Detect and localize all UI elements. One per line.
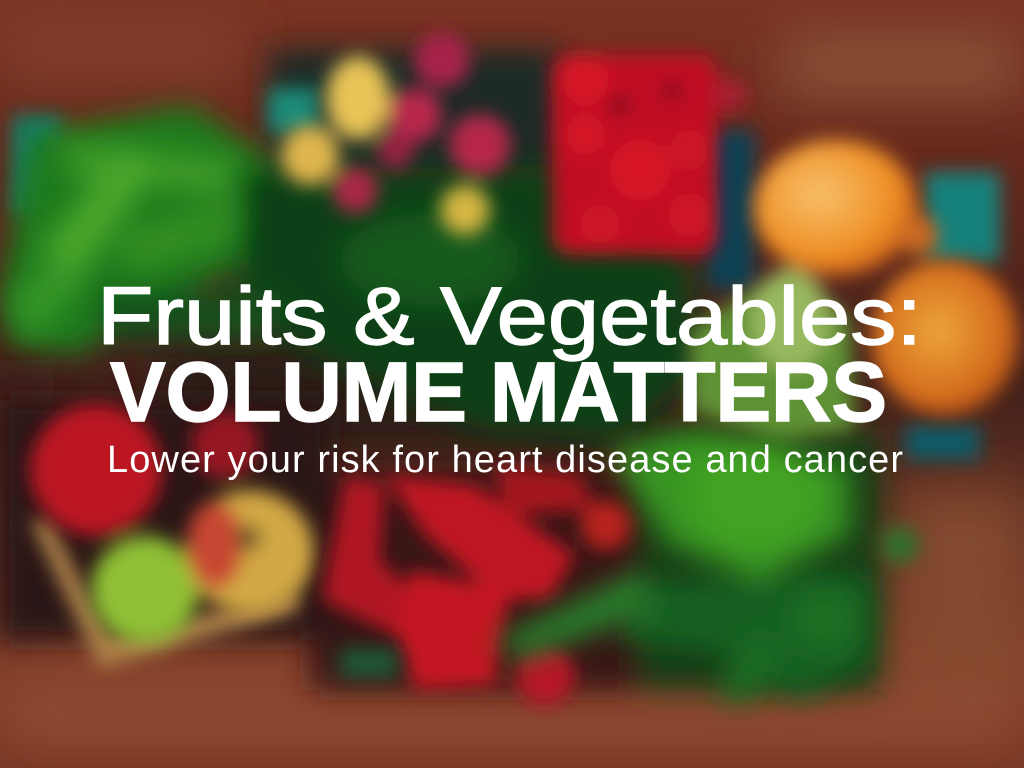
heading: VOLUME MATTERS: VOLUME MATTERS	[110, 345, 887, 439]
red peppers and radishes	[322, 465, 631, 705]
raspberries	[552, 55, 747, 255]
orange, onion, pale cabbage	[690, 140, 1019, 440]
yellow fruit and radishes	[281, 32, 511, 235]
lettuce and dark greens	[610, 430, 870, 700]
crates and dark shadows	[12, 88, 1000, 668]
subtitle: Lower your risk for heart disease and cancer	[107, 439, 903, 481]
title: Fruits & Vegetables: Fruits & Vegetables:	[97, 271, 922, 362]
apples	[30, 404, 314, 644]
leafy greens top left	[0, 105, 700, 440]
dark backing behind produce	[0, 50, 880, 690]
